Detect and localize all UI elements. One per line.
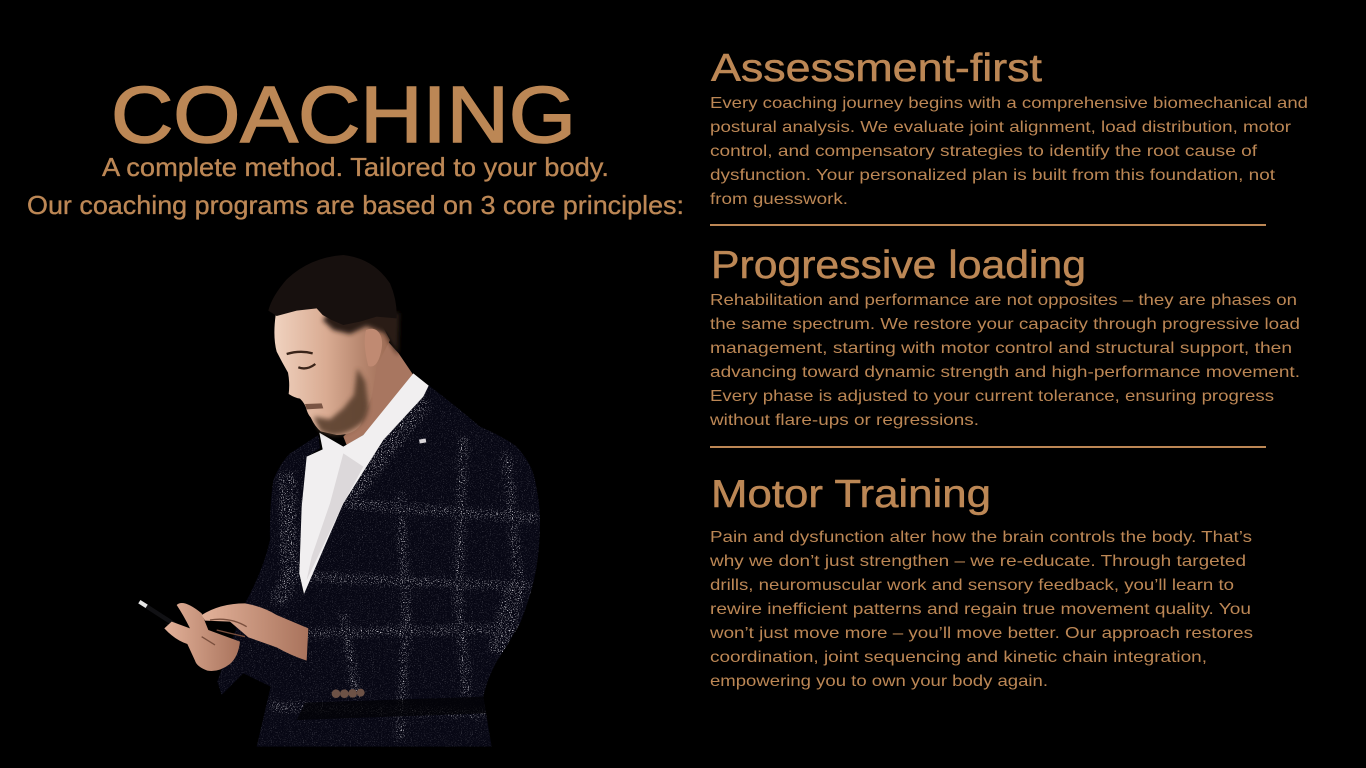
right hand [202,603,308,661]
heading: Assessment-first [711,47,1042,90]
beard [314,368,369,435]
body text: the same spectrum. We restore your capacity through progressive load [710,316,1300,333]
body text: coordination, joint sequencing and kinetic chain integration, [710,649,1207,666]
section: assessment-first [710,47,1308,208]
body text: postural analysis. We evaluate joint alignment, load distribution, motor [710,119,1292,136]
phone [139,602,210,647]
body text: Every coaching journey begins with a comprehensive biomechanical and [710,95,1308,112]
body text: dysfunction. Your personalized plan is built from this foundation, not [710,167,1276,184]
left hand [164,603,240,671]
face [274,303,390,435]
ear [365,329,382,366]
body text: Every phase is adjusted to your current tolerance, ensuring progress [710,388,1274,405]
heading: Progressive loading [711,244,1086,287]
heading: Motor Training [711,473,991,516]
body text: Pain and dysfunction alter how the brain controls the body. That’s [710,529,1252,546]
blazer [217,383,543,747]
body text: management, starting with motor control and structural support, then [710,340,1292,357]
pocket pin [419,438,426,444]
hair [268,255,397,325]
finger lines [202,619,247,645]
shirt shadow fold [307,453,363,580]
body text [710,95,1308,208]
neck [343,340,413,445]
body text [709,292,1300,429]
subtitle: Our coaching programs are based on 3 core principles: [27,190,684,220]
eye and brow [287,352,315,368]
body text: advancing toward dynamic strength and high-performance movement. [710,364,1300,381]
body text: won’t just move more – you’ll move better. Our approach restores [709,625,1253,642]
body text: drills, neuromuscular work and sensory feedback, you’ll learn to [710,577,1234,594]
shirt [299,373,429,594]
section: motor training [709,473,1253,690]
body text: empowering you to own your body again. [710,673,1048,690]
hair fade [323,297,399,355]
section: progressive loading [709,244,1300,429]
title: COACHING [111,70,576,159]
body text: without flare-ups or regressions. [709,412,979,429]
body text: Rehabilitation and performance are not opposites – they are phases on [710,292,1297,309]
body text: from guesswork. [710,191,848,208]
body text: control, and compensatory strategies to identify the root cause of [710,143,1258,160]
subtitle [27,152,684,220]
body text: rewire inefficient patterns and regain true movement quality. You [710,601,1251,618]
body text [709,529,1253,690]
body text: why we don’t just strengthen – we re-educate. Through targeted [709,553,1246,570]
cuff buttons [332,689,365,698]
subtitle: A complete method. Tailored to your body. [102,152,609,182]
photo: coach in plaid blazer looking at phone [139,255,543,747]
